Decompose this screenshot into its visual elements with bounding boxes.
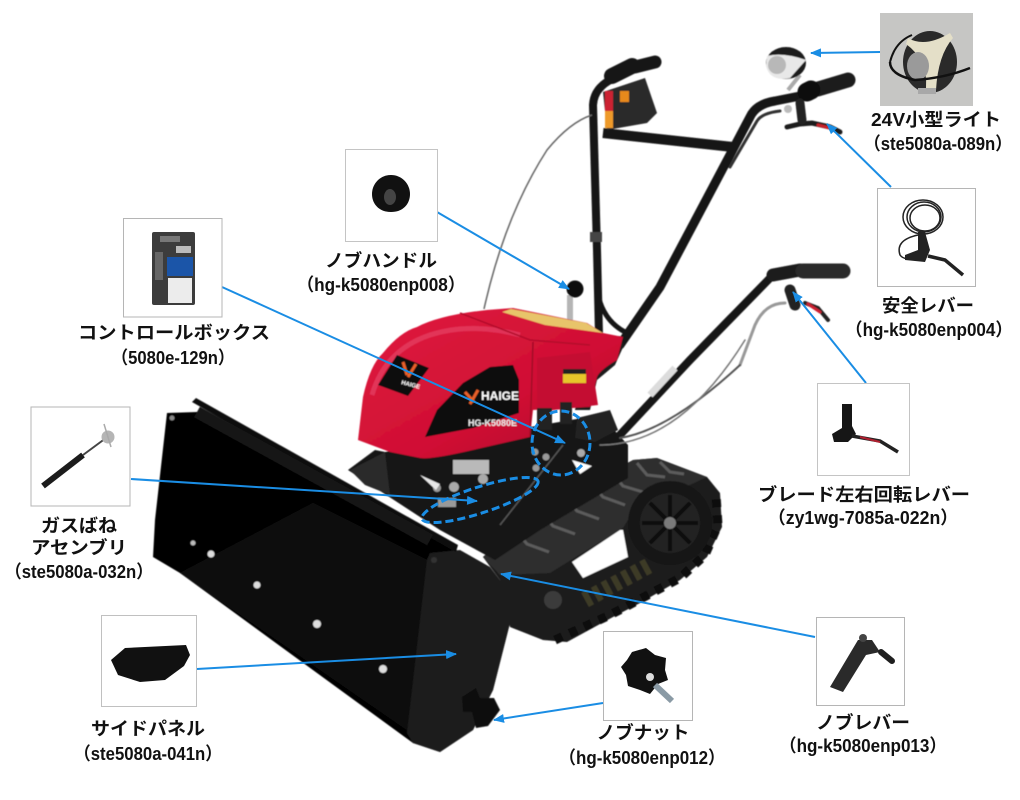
blade fixing knob [462,688,500,728]
label: 24V light [864,110,1012,154]
dashed highlight: control box area [532,411,590,475]
dashed highlight: gas spring area [418,469,542,531]
handlebar frame left post [593,62,733,335]
label: blade rotation lever [758,484,970,528]
arrow: 24V light [811,52,880,53]
label: gas spring: アセンブリ [31,537,127,558]
part: knob nut thumbnail [604,632,692,720]
arrow: safety lever [827,124,891,187]
label: knob lever: ノブレバー [816,712,910,733]
thin control cable [484,115,592,309]
label: 24V light: （ste5080a-089n） [864,134,1012,154]
label: knob nut [559,722,725,768]
label: knob nut: （hg-k5080enp012） [559,748,725,768]
label: knob handle: （hg-k5080enp008） [297,275,465,295]
arrow: side panel [197,654,456,669]
logo sticker on hood: HAIGE [400,380,420,391]
lower operating handle [600,270,843,445]
black side panel with brand: HG-K5080E [468,418,517,428]
label: side panel: （ste5080a-041n） [74,744,222,764]
label: knob nut: ノブナット [596,722,690,743]
label: side panel: サイドパネル [91,719,205,739]
label: control box: コントロールボックス [78,323,270,343]
arrow: knob handle [437,212,569,289]
arrow: knob lever [501,574,815,637]
arrow: gas spring [131,479,477,501]
label: blade rotation lever: （zy1wg-7085a-022n） [768,508,958,528]
label: knob lever: （hg-k5080enp013） [780,736,946,756]
control panel box [603,78,657,130]
label: knob lever [780,712,946,756]
part: 24V light thumbnail [880,13,973,106]
part: safety lever thumbnail [878,188,976,286]
label: knob handle [297,250,465,295]
label: safety lever: （hg-k5080enp004） [846,320,1012,340]
label: knob handle: ノブハンドル [325,250,437,271]
operating handle right [620,80,848,345]
arrow: control box [222,287,565,443]
headlight [766,47,806,90]
label: control box: （5080e-129n） [112,348,234,368]
label: control box [78,323,270,368]
label: safety lever [846,296,1012,340]
part: knob handle thumbnail [346,150,438,242]
label: gas spring [5,516,153,582]
label: gas spring: ガスばね [41,516,117,536]
part: gas spring thumbnail [31,407,130,506]
label: side panel [74,719,222,764]
snow blower machine [153,47,848,752]
label: gas spring: （ste5080a-032n） [5,562,153,582]
black side panel with brand: HAIGE [481,389,519,403]
label: blade rotation lever: ブレード左右回転レバー [758,484,970,505]
label: safety lever: 安全レバー [882,296,974,316]
chassis frame [348,415,628,560]
arrow: knob nut [494,703,603,720]
part: blade rotation lever thumbnail [818,384,910,476]
arrow: blade rotation lever [793,292,866,383]
part: knob lever thumbnail [816,618,904,706]
speed lever knob [566,280,584,327]
part: control box thumbnail [124,218,222,317]
snow blade [153,398,510,752]
logo sticker on hood [378,355,429,396]
black side panel with brand [425,365,519,437]
crawler track [483,458,722,642]
red engine hood [358,308,624,458]
label: 24V light: 24V小型ライト [871,110,1001,130]
part: side panel thumbnail [102,616,196,706]
